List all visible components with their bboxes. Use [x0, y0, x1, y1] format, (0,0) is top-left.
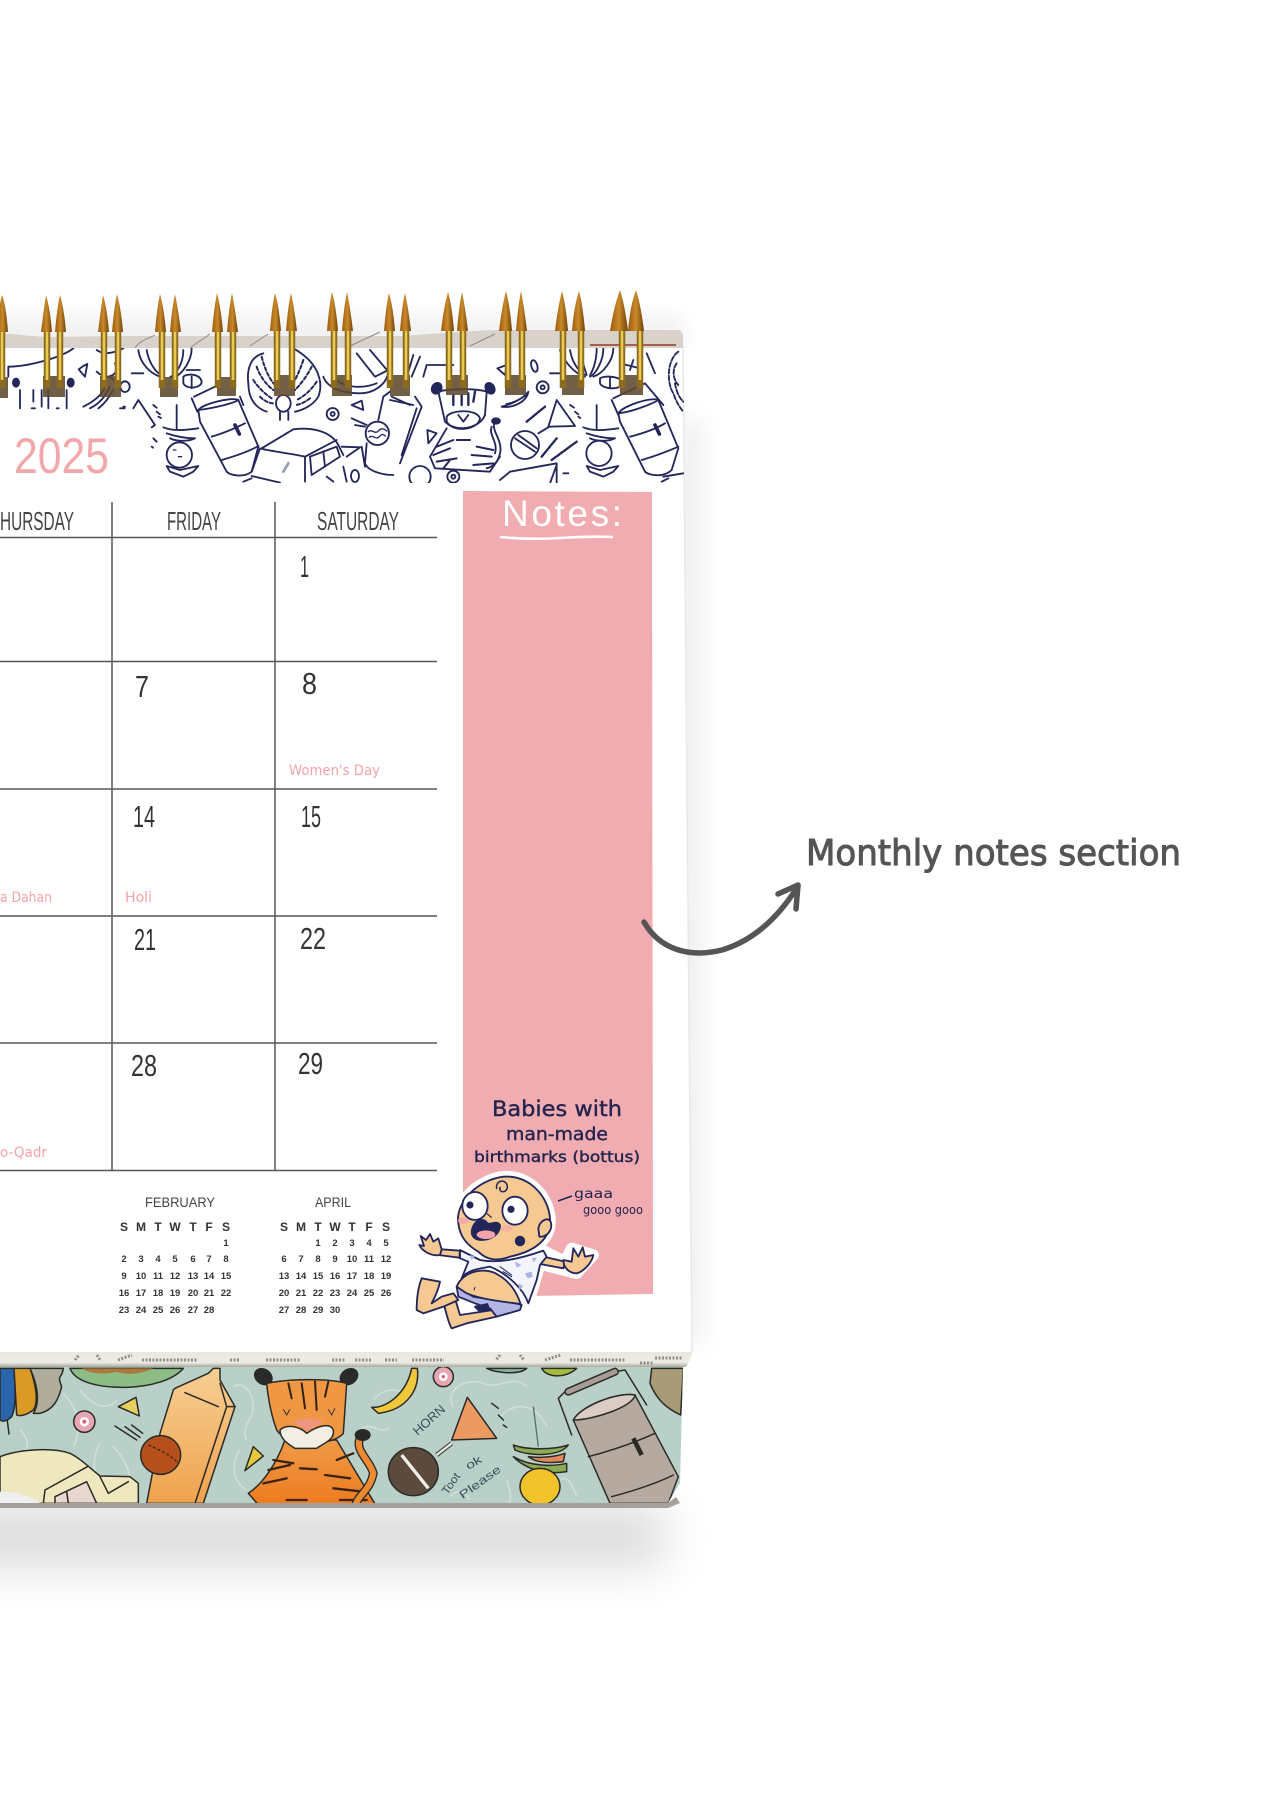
calendar shadows	[0, 315, 704, 1567]
annotation arrow	[644, 885, 798, 953]
beige top strip	[0, 330, 683, 348]
date numbers	[131, 549, 326, 1083]
mini calendar: February: S	[120, 1220, 128, 1234]
horn: Toot	[440, 1470, 464, 1497]
mini calendar: February: 12	[170, 1271, 180, 1282]
plant doodle right	[550, 348, 655, 388]
pink flower	[433, 1367, 453, 1387]
tops of cut-off items	[487, 1368, 683, 1415]
horn doodle	[500, 400, 580, 483]
weekday headers: HURSDAY	[0, 506, 74, 536]
mini calendar: April: 26	[381, 1288, 391, 1299]
orange bottle	[141, 1368, 235, 1503]
mini calendar: April: 22	[313, 1288, 323, 1299]
mini calendar: April: 28	[296, 1305, 306, 1316]
mini calendar: April: 13	[279, 1271, 289, 1282]
wire loops	[2, 330, 640, 388]
mini calendar: April: 3	[349, 1238, 355, 1249]
right half of base print	[355, 1367, 683, 1507]
mini calendar: February: 20	[188, 1288, 198, 1299]
notes heading: Notes:	[502, 493, 622, 534]
mini calendar: April: 11	[364, 1254, 375, 1265]
mini calendar: February: 9	[121, 1271, 127, 1282]
bottle doodle right side	[390, 355, 453, 487]
mini calendar: April: 7	[298, 1254, 304, 1265]
mini calendar: February: 16	[119, 1288, 129, 1299]
mini calendar: April: 9	[332, 1254, 338, 1265]
mini calendar: April: 5	[383, 1238, 389, 1249]
mini calendar: April: M	[296, 1220, 306, 1234]
triangle 2	[245, 1447, 263, 1471]
year heading: 2025	[14, 428, 109, 484]
baby illustration	[417, 1177, 593, 1328]
mini calendar: February: 5	[172, 1254, 178, 1265]
mini calendar: April: 21	[296, 1288, 307, 1299]
flower	[74, 1411, 95, 1432]
spiral binding	[0, 290, 644, 398]
mini calendar: April: 16	[330, 1271, 340, 1282]
mini calendar: February: 26	[170, 1305, 180, 1316]
mini calendar: April: 17	[347, 1271, 357, 1282]
jeep	[0, 1450, 138, 1503]
baby arms	[419, 1234, 593, 1273]
bottle doodle	[365, 392, 410, 475]
baby shirt and belly	[457, 1250, 547, 1317]
mini calendar: February: 15	[221, 1271, 232, 1282]
mini calendar: April: 24	[347, 1288, 358, 1299]
mini calendar: February: 28	[204, 1305, 214, 1316]
mini calendar: April: APRIL	[315, 1194, 351, 1210]
baby caption: birthmarks (bottus)	[474, 1148, 640, 1166]
mini calendar: April: 19	[381, 1271, 391, 1282]
mini calendar: February: 23	[119, 1305, 129, 1316]
mini calendar: February: S	[222, 1220, 230, 1234]
small shapes	[327, 401, 367, 427]
mini calendar: April: 10	[347, 1254, 357, 1265]
holiday labels: Holi	[125, 890, 152, 906]
baby caption: man-made	[506, 1124, 608, 1145]
mini calendar: April: T	[314, 1220, 322, 1234]
horn	[388, 1397, 507, 1502]
date numbers: 14	[133, 799, 155, 834]
annotation label: Monthly notes section	[806, 833, 1181, 874]
mini calendar: April: W	[329, 1220, 341, 1234]
doodle header band	[8, 348, 683, 487]
mini calendar: April: 15	[313, 1271, 324, 1282]
green bowl	[70, 1368, 183, 1387]
plant doodle	[123, 348, 202, 407]
motion dashes	[115, 1425, 143, 1440]
base pattern lines	[20, 1385, 253, 1500]
triangle, drop, flower, banana	[427, 359, 549, 443]
base pattern lines	[360, 1381, 577, 1507]
mini calendar: February: M	[136, 1220, 146, 1234]
mini calendar: April: F	[365, 1220, 373, 1234]
banana	[372, 1368, 418, 1413]
tiffin doodle right	[612, 383, 683, 482]
mini calendar: April: 1	[315, 1238, 321, 1249]
calendar grid	[0, 502, 437, 1171]
horn: Please	[457, 1464, 504, 1502]
mini calendar: April: S	[280, 1220, 288, 1234]
horn: ok	[464, 1454, 485, 1473]
lemon doodle	[583, 405, 618, 477]
mini calendar: April: 4	[366, 1238, 372, 1249]
date numbers: 1	[300, 549, 309, 584]
holiday labels: Women's Day	[289, 763, 380, 779]
date numbers: 15	[301, 799, 321, 834]
mini calendar: April: 30	[330, 1305, 340, 1316]
tiger	[248, 1364, 377, 1507]
triangle	[118, 1397, 139, 1416]
date numbers: 7	[135, 669, 149, 704]
notes underline	[500, 537, 613, 539]
tiffin doodle	[192, 387, 258, 476]
blue bottle	[0, 1368, 15, 1421]
mini calendar: February: W	[169, 1220, 181, 1234]
left half of base print	[0, 1364, 377, 1507]
mini calendar: February: 4	[155, 1254, 161, 1265]
mini calendar: February	[119, 1194, 232, 1316]
mini calendar: February: 1	[223, 1238, 229, 1249]
mini calendar: April: 27	[279, 1305, 289, 1316]
mini calendar: April: S	[382, 1220, 390, 1234]
mini calendar: February: 3	[138, 1254, 144, 1265]
calendar page	[0, 346, 692, 1352]
mini calendar: February: 18	[153, 1288, 163, 1299]
mini calendar: February: 27	[188, 1305, 198, 1316]
corn and elephant	[7, 1368, 63, 1434]
mini calendar: April: 6	[281, 1254, 287, 1265]
weekday headers	[0, 506, 399, 536]
baby head	[458, 1177, 551, 1259]
mini calendar: February: 19	[170, 1288, 180, 1299]
mini calendar: February: 11	[153, 1271, 164, 1282]
date numbers: 28	[131, 1048, 157, 1083]
mini calendar: February: 10	[136, 1271, 146, 1282]
baby caption: gaaa	[574, 1187, 613, 1202]
tail	[355, 1429, 373, 1503]
mini calendar: April: 8	[315, 1254, 321, 1265]
panel: notes	[463, 491, 653, 1296]
mini calendar: February: F	[205, 1220, 213, 1234]
speech dash	[558, 1196, 572, 1201]
copper loop tops	[0, 290, 644, 332]
mini calendar: February: 17	[136, 1288, 146, 1299]
baby caption	[474, 1097, 643, 1217]
mini calendar: February: FEBRUARY	[145, 1194, 216, 1210]
horn: HORN	[410, 1402, 448, 1438]
date numbers: 21	[134, 922, 156, 957]
mini calendar: April: 14	[296, 1271, 307, 1282]
mini calendar: April: 29	[313, 1305, 323, 1316]
mini calendar: February: T	[189, 1220, 197, 1234]
mini calendar: February: 25	[153, 1305, 164, 1316]
mini calendar: February: T	[154, 1220, 162, 1234]
mini calendar: April: 23	[330, 1288, 340, 1299]
left doodles	[8, 348, 130, 408]
lemon doodle	[163, 405, 198, 477]
baby caption: Babies with	[492, 1097, 622, 1121]
mini calendar: April: 2	[332, 1238, 338, 1249]
mini calendar: April	[279, 1194, 391, 1316]
stick doodle	[133, 400, 161, 448]
tiger doodle	[430, 381, 501, 483]
date numbers: 22	[300, 921, 326, 956]
date numbers: 29	[298, 1046, 323, 1081]
mini calendar: February: 21	[204, 1288, 215, 1299]
mini calendar: February: 14	[204, 1271, 215, 1282]
mini calendar: April: 12	[381, 1254, 391, 1265]
baby sticker outline	[417, 1177, 593, 1328]
mini calendar: February: 2	[121, 1254, 127, 1265]
weekday headers: FRIDAY	[167, 506, 221, 536]
mini calendar: February: 7	[206, 1254, 212, 1265]
mini calendar: April: T	[348, 1220, 356, 1234]
mini calendar: February: 8	[223, 1254, 229, 1265]
binding holes	[0, 375, 643, 398]
mini calendar: February: 6	[190, 1254, 196, 1265]
baby caption: gooo gooo	[583, 1203, 643, 1217]
lemon and chillies	[513, 1407, 568, 1505]
bowl doodle	[323, 350, 388, 393]
tiger top-left doodle	[8, 348, 130, 408]
holiday labels: a Dahan	[0, 890, 52, 906]
peacock doodle	[248, 348, 320, 420]
peacock doodle right	[669, 352, 683, 412]
mini calendar: April: 25	[364, 1288, 375, 1299]
date numbers: 8	[302, 666, 317, 701]
holiday labels: o-Qadr	[0, 1145, 47, 1161]
weekday headers: SATURDAY	[317, 506, 399, 536]
mini calendar: February: 24	[136, 1305, 147, 1316]
tiffin	[558, 1370, 678, 1503]
mini calendar: February: 13	[188, 1271, 198, 1282]
mini calendar: April: 20	[279, 1288, 289, 1299]
bottom hinge strip	[0, 1352, 692, 1367]
mini calendar: April: 18	[364, 1271, 374, 1282]
holiday labels	[0, 763, 380, 1161]
baby legs	[417, 1278, 497, 1328]
jeep doodle	[243, 429, 365, 483]
mini calendar: February: 22	[221, 1288, 231, 1299]
calendar stand base with illustrated print	[0, 1364, 683, 1508]
